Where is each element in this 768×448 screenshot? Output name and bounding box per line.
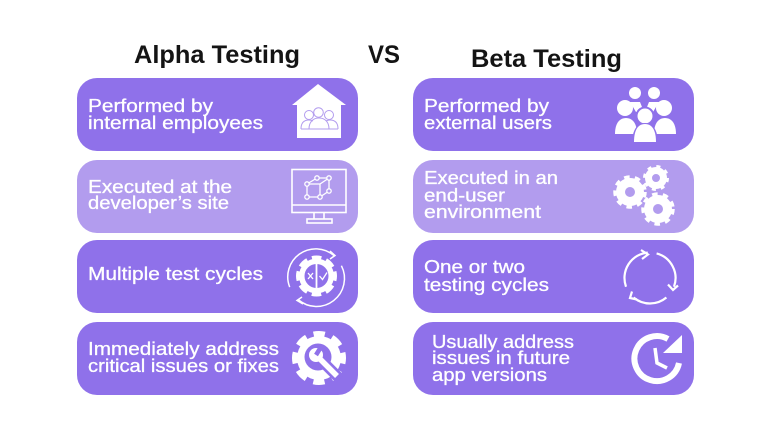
panel: performed by external users: [413, 78, 694, 151]
icon: gear with wrench: [296, 334, 342, 382]
icon: clock with arrow: [634, 335, 682, 381]
icon: three cycle arrows: [624, 250, 678, 303]
panel: performed by internal employees: internal employees: [88, 112, 263, 133]
panel: performed by internal employees: Performed by: [88, 95, 214, 116]
icon: monitor with network cube: [292, 170, 346, 223]
panel: usually address issues in future versions: Usually address: [432, 331, 574, 352]
panel: one or two testing cycles: testing cycles: [424, 274, 549, 295]
heading: Beta Testing: Beta Testing: [471, 45, 622, 73]
heading: Alpha Testing: Alpha Testing: [134, 41, 300, 69]
panel: immediately address critical issues: [77, 322, 358, 395]
panel: executed in an end-user environment: environment: [424, 201, 541, 222]
panel: one or two testing cycles: One or two: [424, 256, 525, 277]
panel: executed in an end-user environment: end-user: [424, 184, 505, 206]
panel: usually address issues in future versions: app versions: [432, 364, 547, 385]
panel: performed by external users: external users: [424, 112, 552, 133]
panel: one or two testing cycles: [413, 240, 694, 313]
panel: executed at the developer's site: Executed at the: [88, 176, 232, 197]
icon: gear with check and cross in cycle arrows: [288, 249, 344, 306]
icon: group of users: [615, 87, 676, 144]
icon: house with people: [292, 84, 346, 138]
heading: VS: VS: [368, 41, 400, 69]
panel: executed in an end-user environment: [413, 160, 694, 233]
panel: usually address issues in future versions: issues in future: [432, 347, 570, 368]
panel: executed at the developer's site: [77, 160, 358, 233]
panel: executed at the developer's site: developer’s site: [88, 192, 229, 213]
panel: immediately address critical issues: critical issues or fixes: [88, 355, 279, 376]
panel: multiple test cycles: Multiple test cycles: [88, 263, 263, 284]
panel: multiple test cycles: [77, 240, 358, 313]
panel: executed in an end-user environment: Executed in an: [424, 167, 558, 188]
panel: usually address issues in future versions: [413, 322, 694, 395]
icon: three gears: [615, 166, 673, 224]
panel: performed by internal employees: [77, 78, 358, 151]
panel: performed by external users: Performed by: [424, 95, 550, 116]
panel: immediately address critical issues: Immediately address: [88, 338, 279, 359]
